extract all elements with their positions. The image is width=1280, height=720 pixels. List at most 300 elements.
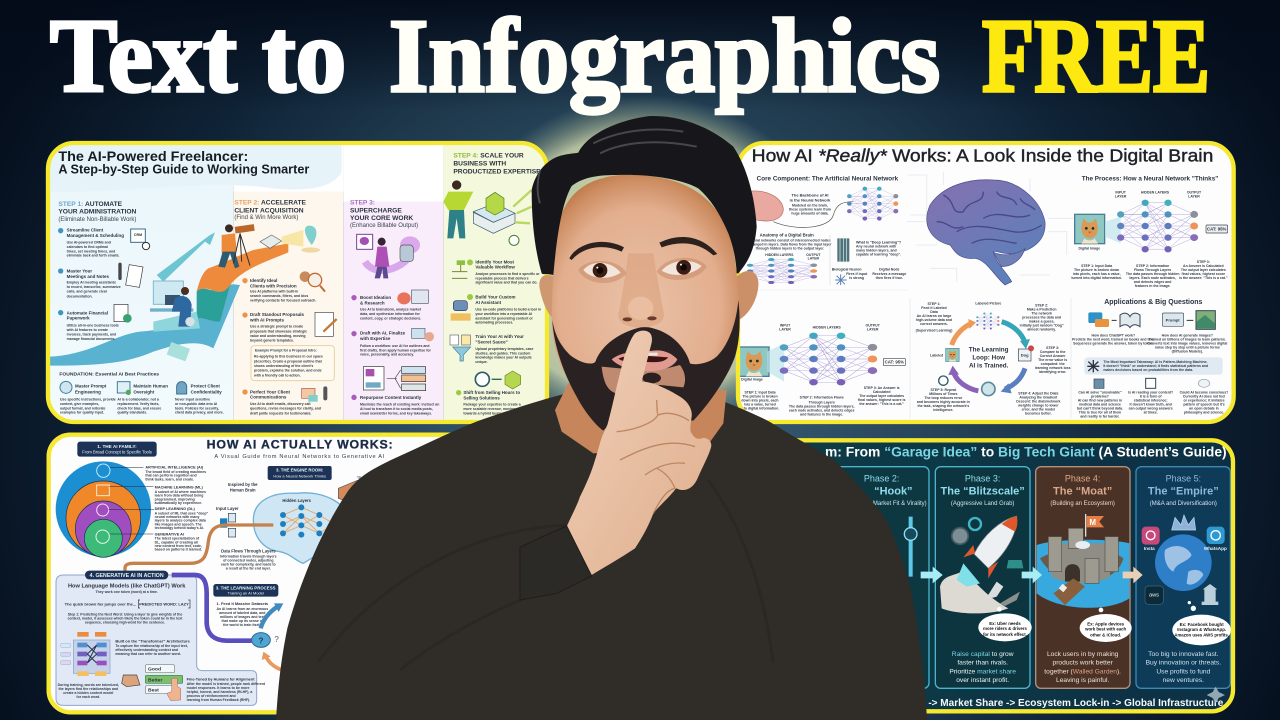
hair — [532, 116, 757, 275]
step 3: data, and synthesize information for — [360, 312, 420, 316]
section: core component: Digital Node — [879, 267, 900, 271]
section: the learning loop: identifying error. — [1039, 370, 1066, 374]
section: applications and big questions: philosophy and science. — [1184, 411, 1224, 415]
section: the learning loop: The error value is — [1038, 358, 1067, 362]
phase 2: “Hook” — [874, 485, 913, 497]
section: lower left network: LAYER — [779, 328, 791, 332]
step 2: value and understanding, moving — [250, 334, 306, 338]
section: the learning loop: The Learning — [969, 347, 1009, 354]
section: the learning process: An AI learns from an enormous — [216, 607, 268, 611]
sweater — [276, 385, 927, 720]
foundation: Oversight — [133, 389, 155, 394]
section: core component: Any neural network with — [856, 245, 896, 249]
section: the learning loop: almost randomly. — [1027, 328, 1056, 332]
section: the process: STEP 1: Input Data — [1081, 264, 1112, 268]
section: the learning loop: weights change to lower — [1017, 403, 1059, 407]
section: the learning loop: Descent: the dials/network — [1016, 399, 1060, 403]
step 2: draft polite requests for testimonials. — [250, 411, 311, 415]
step 3: YOUR CORE WORK — [350, 215, 413, 222]
phase 4: M — [1089, 518, 1096, 527]
section: generative AI in action: Best — [148, 688, 159, 694]
section: the engine room — [216, 466, 362, 570]
section: core component: Core Component: The Artificial Neural Network — [757, 176, 899, 183]
section: the learning loop: Dog — [1021, 353, 1029, 358]
section: generative AI in action: How Language Models (like ChatGPT) Work — [68, 583, 186, 589]
section: generative AI in action: helpful, honest, and harmless (RLHF), a — [187, 690, 252, 694]
section: lower left network: each node activates, and detects edges — [789, 409, 854, 413]
illustration: large brain — [907, 172, 1073, 285]
right eyebrow — [659, 237, 717, 255]
step 3: (Enhance Billable Output) — [350, 223, 418, 229]
section: generative AI in action: for each word. — [76, 695, 100, 699]
step 4: unique. — [475, 360, 488, 364]
section: applications and big questions: How does ChatGPT work? — [1092, 334, 1135, 338]
section: the learning loop: (Supervised Learning) — [916, 329, 952, 333]
section: generative AI in action: After the model is trained, people rank different — [187, 682, 266, 686]
section: generative AI in action: model responses. It learns to be more — [187, 686, 249, 690]
section: the process: Digital Image — [1078, 247, 1100, 251]
title: Infographics — [389, 0, 940, 114]
step 4: Analyze processes to find a specific or — [475, 272, 540, 276]
nose — [618, 253, 664, 328]
section: generative AI in action: Fine-Tuned by Humans for Alignment — [187, 678, 255, 682]
section: applications and big questions: Can AI solve "unsolvable" — [1078, 391, 1122, 395]
phase 5: WhatsApp — [1204, 546, 1227, 551]
section: the engine room: Information travels through layers — [220, 554, 277, 558]
section: core component: OUTPUT — [806, 253, 821, 257]
step 4: AI Assistant — [475, 300, 502, 305]
section: lower left network: has a value, turned — [744, 402, 776, 406]
phase 2: (Product-Market Fit & Virality) — [848, 501, 927, 507]
section: applications and big questions: noise step by step until a picture forms — [1155, 346, 1220, 350]
step 4: Valuable Workflow — [475, 265, 515, 270]
section: applications and big questions: medical data and science — [1079, 403, 1121, 407]
foundation: client data privacy, and more. — [175, 411, 224, 415]
card title: HOW AI ACTUALLY WORKS: — [207, 437, 393, 451]
section: the process: The output layer calculates — [1181, 268, 1226, 272]
step 2: Example Prompt for a Proposal Intro: — [255, 349, 317, 353]
section: the AI family: new content from text, code, — [155, 544, 202, 548]
section: applications and big questions: an open debate in — [1189, 407, 1219, 411]
section: applications and big questions: at times. — [1144, 411, 1158, 415]
section: the learning loop: and becomes highly accurate in — [917, 400, 970, 404]
card subtitle: A Visual Guide from Neural Networks to Generative AI — [214, 454, 385, 460]
section: the engine room: learned — [357, 484, 369, 488]
section: lower left network: The output layer calculates — [859, 394, 904, 398]
section: the engine room: Many layers — [357, 480, 377, 484]
foundation: Master Prompt — [75, 383, 107, 388]
generative AI pill — [85, 571, 168, 579]
section: applications and big questions: Prompt — [1166, 318, 1180, 323]
section: generative AI in action: sequence, choosing high-word for the sentence. — [85, 620, 165, 624]
section: core component: is the Neural Network — [790, 197, 831, 202]
section: the learning loop: AI is Trained. — [969, 362, 1009, 369]
section: generative AI in action: To capture the relationship of the input text, — [115, 644, 188, 648]
phase 5 — [1136, 467, 1231, 688]
section: the learning loop: The network — [1031, 312, 1052, 316]
section: applications and big questions: Converts text into image values, removes digital — [1147, 342, 1227, 346]
section: the learning loop: computed: the — [1041, 362, 1065, 366]
section: the process: and detects edges and — [1134, 280, 1171, 284]
step 2: verifying contacts for focused outreach. — [250, 298, 316, 302]
section: the learning loop: Feed it Labeled — [921, 306, 947, 310]
panel: AI-Powered Freelancer — [47, 142, 550, 423]
generative AI pill: 4. GENERATIVE AI IN ACTION — [90, 573, 164, 579]
section: generative AI in action: meaning that can refer to another word. — [115, 652, 181, 656]
phase 4 — [1036, 467, 1132, 688]
step 2: Identify Ideal — [250, 278, 277, 283]
step 3: Follow a workflow: use AI for outlines and — [360, 344, 430, 348]
step 1: calendars to find optimal — [67, 245, 108, 249]
section: lower left network: LAYER — [867, 328, 879, 332]
section: the learning loop: STEP 3: — [1046, 346, 1059, 350]
section: the learning loop: learning network loss — [1035, 366, 1071, 370]
section: applications and big questions: Applications & Big Questions — [1104, 299, 1203, 306]
step 1: YOUR ADMINISTRATION — [58, 209, 137, 216]
step 2: Clients with Precision — [250, 283, 297, 288]
step 1: manage financial documents. — [67, 337, 115, 341]
step 1: (Eliminate Non-Billable Work) — [58, 217, 136, 223]
left eye — [583, 263, 621, 278]
section: core component: then fires if true. — [876, 276, 903, 280]
section: the process: is the answer: "This is a cat." — [1179, 276, 1228, 280]
foundation: replacement. Verify facts, — [117, 402, 159, 406]
section: the process: INPUT — [1115, 190, 1127, 194]
section: the process: The Process: How a Neural Network "Thinks" — [1082, 176, 1218, 183]
foundation: Maintain Human — [133, 383, 168, 388]
section: applications and big questions: This is true for all of them — [1079, 411, 1121, 415]
section: the process: OUTPUT — [1187, 190, 1202, 194]
foundation: Never input sensitive — [175, 398, 210, 402]
section: the learning loop — [910, 298, 1071, 418]
phase 3: (Aggressive Land Grab) — [951, 501, 1014, 507]
section: the AI family: based on patterns it learned. — [155, 548, 202, 552]
section: the learning loop: initially just random "Dog" — [1020, 324, 1064, 328]
section: core component: Fires if input — [846, 272, 868, 276]
step 1: documentation. — [67, 295, 93, 299]
section: core component: through hidden layers to the output layer. — [756, 247, 824, 251]
section: the engine room: Human Brain — [230, 488, 256, 493]
phase 5: Use profits to fund — [1156, 668, 1211, 675]
step 3: Use AI to brainstorm, analyze market — [360, 308, 422, 312]
step 1 — [58, 201, 150, 341]
phase 3: faster than rivals. — [957, 660, 1008, 667]
foundation: AI is a collaborator, not a — [117, 398, 159, 402]
title — [50, 0, 1210, 114]
foundation: examples for quality input. — [60, 411, 104, 415]
section: applications and big questions: or experience; it imitates — [1183, 399, 1225, 403]
step 4: knowledge makes your AI outputs — [475, 356, 532, 360]
step 4: significant value and that you can do. — [475, 281, 538, 285]
section: lower left network — [739, 290, 907, 417]
section: the AI family: like images and speech. The — [155, 522, 202, 526]
arrow: phase 2 to 3 — [921, 567, 943, 583]
step 3: email newsletter forms, and key takeaways. — [360, 411, 432, 415]
section: the learning process: 1. Feed it Massive Datasets — [217, 601, 269, 606]
section: the engine room: Data Flows Through Layers — [221, 549, 276, 554]
section: the learning loop: STEP 4: Adjust the Dials — [1018, 391, 1059, 395]
step 4: PRODUCTIZED EXPERTISE — [453, 168, 541, 175]
phase 4: Lock users in by making — [1047, 651, 1119, 658]
step 4: Package your expertise to create a — [463, 403, 521, 407]
phase 4: work best with each — [1084, 627, 1127, 632]
finger creases — [617, 400, 695, 513]
section: the learning loop: The loop reduces error — [924, 396, 963, 400]
section: core component — [747, 176, 906, 285]
section: the AI family: that can perform cognition and — [145, 474, 197, 478]
phase 2: Phase 2: — [864, 474, 899, 484]
phase 4: The “Moat” — [1053, 485, 1112, 497]
face — [552, 175, 739, 403]
step 3: SUPERCHARGE — [350, 207, 402, 214]
section: the learning loop: becomes better. — [1025, 411, 1052, 415]
step 4: BUSINESS WITH — [453, 161, 506, 168]
step 2: STEP 2: ACCELERATE — [234, 199, 307, 206]
section: the learning loop: makes a guess, — [1029, 320, 1055, 324]
phase 5: (M&A and Diversification) — [1150, 501, 1217, 507]
eye sockets — [578, 258, 707, 283]
arrow: phase 4 to 5 — [1123, 567, 1143, 583]
step 4: Train Your AI with Your — [475, 334, 524, 339]
section: core component: is strong — [849, 276, 864, 280]
section: the process: Flows Through Layers — [1134, 268, 1171, 272]
step 2: Re-applying to this business in our space — [254, 355, 323, 359]
section: the learning loop: Millions of Times — [929, 392, 957, 396]
foundation: check for bias, and ensure — [117, 406, 161, 410]
card title: The AI-Powered Freelancer: — [58, 148, 248, 164]
step 4 — [443, 153, 541, 415]
step 3 — [350, 199, 439, 415]
section: the AI family: GENERATIVE AI — [155, 532, 184, 536]
illustration: workflow river — [50, 232, 288, 366]
bottom summary line: -> Market Share -> Ecosystem Lock-in -> Global Infrastructure — [928, 698, 1224, 709]
section: lower left network: Through Layers — [808, 400, 835, 404]
card title: A Step-by-Step Guide to Working Smarter — [58, 162, 309, 176]
foundation: quality standards. — [117, 411, 147, 415]
section: the learning loop: processes the data and — [1022, 316, 1061, 320]
section: lower left network: INPUT — [780, 324, 791, 328]
phase 4: Leaving is painful. — [1056, 677, 1109, 684]
section: the engine room: Hidden Layers — [282, 498, 312, 503]
illustration: telescope figure — [218, 224, 320, 268]
phase 3: for its network effect. — [983, 632, 1027, 637]
card title: m: From “Garage Idea” to Big Tech Giant (A Student’s Guide) — [825, 445, 1227, 460]
section: the learning loop: Analyzing the Gradient — [1019, 395, 1058, 399]
section: core component: LAYER — [808, 257, 820, 261]
section: the process: CAT: 95% — [1207, 227, 1227, 232]
step 3: Boost Ideation — [360, 295, 391, 300]
section: generative AI in action: create a hidden context model — [63, 691, 113, 695]
step 1: Use AI-powered CRMs and — [67, 241, 111, 245]
step 1: Utilize all-in-one business tools — [67, 324, 119, 328]
chin skin — [602, 365, 685, 394]
section: the process: The picture is broken down — [1074, 268, 1119, 272]
section: generative AI in action: During training, words are tokenized, — [58, 683, 119, 687]
section: core component: Biological Neuron — [832, 267, 862, 271]
section: the process: into pixels, each has a value, — [1073, 272, 1121, 276]
section: applications and big questions: it doesn't know truth, and — [1130, 403, 1172, 407]
section: applications and big questions: (Diffusion Models). — [1172, 350, 1203, 354]
section: the learning loop: high-volume data and — [916, 318, 952, 322]
section: generative AI in action: The quick brown fox jumps over the... — [65, 602, 136, 607]
section: the process: features in the image. — [1135, 284, 1171, 288]
section: lower left network: The picture is broken — [742, 394, 778, 398]
section: the AI family: DEEP LEARNING (DL) — [155, 507, 196, 511]
phase 2 — [840, 466, 930, 689]
section: applications and big questions: It is a form of — [1140, 395, 1162, 399]
step 1: Streamline Client — [67, 228, 104, 233]
step 1: Automate Financial — [67, 310, 108, 315]
section: the learning process — [213, 584, 283, 670]
step 3: Draft with AI, Finalize — [360, 331, 406, 336]
step 4: repeatable process that delivers — [475, 276, 529, 280]
section: applications and big questions: How does AI generate images? — [1162, 334, 1213, 338]
step 4: Upload proprietary templates, case — [475, 347, 533, 351]
section: the learning loop: Compare to the — [1040, 350, 1065, 354]
mouth opening — [618, 356, 668, 362]
section: the process: final values, highest score — [1182, 272, 1225, 276]
section: core component: these systems learn from — [789, 208, 831, 212]
step 1: STEP 1: AUTOMATE — [58, 201, 123, 208]
title: Text to — [50, 0, 346, 114]
step 1: Employ AI meeting assistants — [67, 281, 116, 285]
section: the learning process: ? — [259, 636, 264, 645]
section: generative AI in action: context, model, it assesses which likely the token could be in the text — [68, 616, 183, 620]
phase 5: Instagram & WhatsApp. — [1177, 627, 1226, 632]
section: the AI family: think tasks, learn, and create. — [145, 477, 194, 481]
section: generative AI in action: Built on the "Transformer" Architecture — [115, 638, 191, 643]
step 2: with AI Prompts — [249, 317, 284, 322]
section: the AI family: A subset of AI where machines — [155, 490, 206, 494]
step 2: Use AI to draft emails, discovery call — [250, 402, 311, 406]
section: lower left network: Calculated — [873, 390, 890, 394]
section: lower left network: into digital information. — [741, 406, 779, 410]
step 3: with Expertise — [359, 336, 391, 341]
section: the AI family: DL, capable of creating all — [155, 540, 198, 544]
section: the learning loop: Labeled — [930, 354, 943, 358]
section: lower left network: down into pixels, each — [741, 398, 779, 402]
section: the learning process: amount of labeled data, and — [219, 611, 265, 615]
phase 5: The “Empire” — [1148, 485, 1219, 497]
step 1: eliminate back and forth emails. — [67, 254, 120, 258]
section: core component: huge amounts of data. — [791, 212, 829, 216]
teeth — [648, 353, 658, 356]
right ear — [737, 271, 758, 321]
step 2: proposals that showcase strategic — [250, 329, 307, 333]
section: lower left network: final values, highest score is — [858, 398, 905, 402]
section: core component: The Backbone of AI — [791, 192, 829, 197]
section: applications and big questions: problems? — [1091, 395, 1109, 399]
section: the AI family: A subset of ML that uses "deep" — [155, 511, 208, 515]
section: lower left network: CAT: 95% — [885, 360, 904, 365]
section: the process: LAYER — [1115, 194, 1127, 198]
section: the engine room: Input Layer — [216, 506, 239, 511]
section: the learning loop: STEP 5: Repeat — [930, 388, 957, 392]
step 4: Build Your Custom — [475, 294, 516, 299]
section: lower left network: The data passes through hidden layers, — [789, 405, 855, 409]
hair highlights — [537, 129, 697, 203]
step 4: Selling Solutions — [463, 395, 500, 400]
section: core component: capable of learning "deep". — [856, 253, 901, 257]
card title: How AI *Really* Works: A Look Inside the Digital Brain — [752, 146, 1213, 166]
step 4: STEP 4: SCALE YOUR — [453, 153, 524, 160]
step 2 — [234, 199, 337, 415]
foundation: context, give examples, — [60, 402, 99, 406]
phase 4: (Building an Ecosystem) — [1050, 501, 1115, 507]
foundation: tools. Policies for security, — [175, 406, 219, 410]
section: applications and big questions: Is AI reading your content? — [1128, 391, 1173, 395]
left ear — [539, 275, 553, 318]
section: core component: arranged in layers. Data flows from the input layer — [749, 243, 832, 247]
section: lower left network: Digital Image — [741, 378, 763, 382]
phase 5: Buy innovation or threats. — [1146, 660, 1221, 667]
section: the AI family: ARTIFICIAL INTELLIGENCE (AI) — [145, 466, 204, 470]
step 1: Meetings and Notes — [67, 274, 110, 279]
section: the learning loop: An AI learns on large — [917, 314, 951, 318]
section: core component: many hidden layers, and — [856, 249, 897, 253]
phase 3: Ex: Uber needs — [989, 621, 1021, 626]
section: applications and big questions: can output wrong answers — [1129, 407, 1173, 411]
step 2: with a friendly call to action. — [253, 373, 301, 377]
section: the AI family: layers to analyze complex data — [155, 519, 206, 523]
step 1: Paperwork — [67, 316, 90, 321]
section: the learning loop: the task, shaping the network's — [917, 404, 969, 408]
section: generative AI in action: effectively understanding context and — [115, 648, 178, 652]
section: generative AI in action — [56, 575, 266, 705]
section: the AI family: technology behind today's AI. — [155, 526, 204, 530]
section: applications and big questions: statistical inference; — [1134, 399, 1168, 403]
section: the process: STEP 2: Information — [1136, 264, 1169, 268]
section: the AI family: neural networks with many — [155, 515, 199, 519]
panel: How AI Really Works — [737, 142, 1235, 423]
phase 3: Phase 3: — [965, 474, 1000, 484]
head and hand, drawn in crop coordinates — [520, 116, 758, 600]
section: applications and big questions: pattern of speech but it's — [1183, 403, 1225, 407]
beard — [552, 300, 740, 431]
phase 3: Raise capital to grow — [952, 651, 1014, 658]
section: generative AI in action: Step 1: Predicting the Next Word: Using a layer to give weights of the — [68, 612, 182, 616]
step 2: shows understanding of the client's — [254, 364, 313, 368]
foundation: or non-public data into AI — [175, 402, 217, 406]
neck — [555, 383, 727, 453]
step 4: automating processes. — [475, 321, 513, 325]
phase 3: Prioritize market share — [949, 668, 1016, 675]
section: the engine room: each for complexity, and leads to — [221, 562, 276, 566]
section: lower left network: OUTPUT — [866, 324, 881, 328]
section: the AI family: 1. THE AI FAMILY: — [97, 444, 137, 449]
section: lower left network: HIDDEN LAYERS — [813, 325, 841, 329]
step 1: CRM — [134, 233, 142, 237]
section: applications and big questions: Sequences generate the answer, token by token. — [1073, 342, 1154, 346]
section: applications and big questions: and reality is far harder. — [1080, 415, 1120, 419]
phase 5: aws — [1149, 593, 1159, 599]
section: the learning loop: STEP 1: — [927, 302, 941, 306]
phase 5: Ex: Facebook bought — [1180, 622, 1224, 627]
section: the engine room: Inspired by the — [228, 482, 258, 487]
step 3: Maximize the reach of existing work: instruct an — [360, 403, 439, 407]
section: the learning loop: correct answers. — [920, 322, 948, 326]
step 3: AI tool to transform it to social media posts, — [360, 407, 433, 411]
section: applications and big questions: Predicts the next word, trained on books and text. — [1072, 338, 1155, 342]
person: presenter with finger on lips — [276, 116, 927, 720]
head glow — [455, 95, 835, 435]
step 2: Use AI platforms with built-in — [250, 290, 298, 294]
phase 4: Phase 4: — [1065, 474, 1100, 484]
section: lower left network: STEP 1: Input Data — [744, 390, 776, 394]
sleeve folds — [318, 480, 773, 670]
step 2: CLIENT ACQUISITION — [234, 207, 304, 214]
section: the process: layers. Each node activates, — [1129, 276, 1176, 280]
